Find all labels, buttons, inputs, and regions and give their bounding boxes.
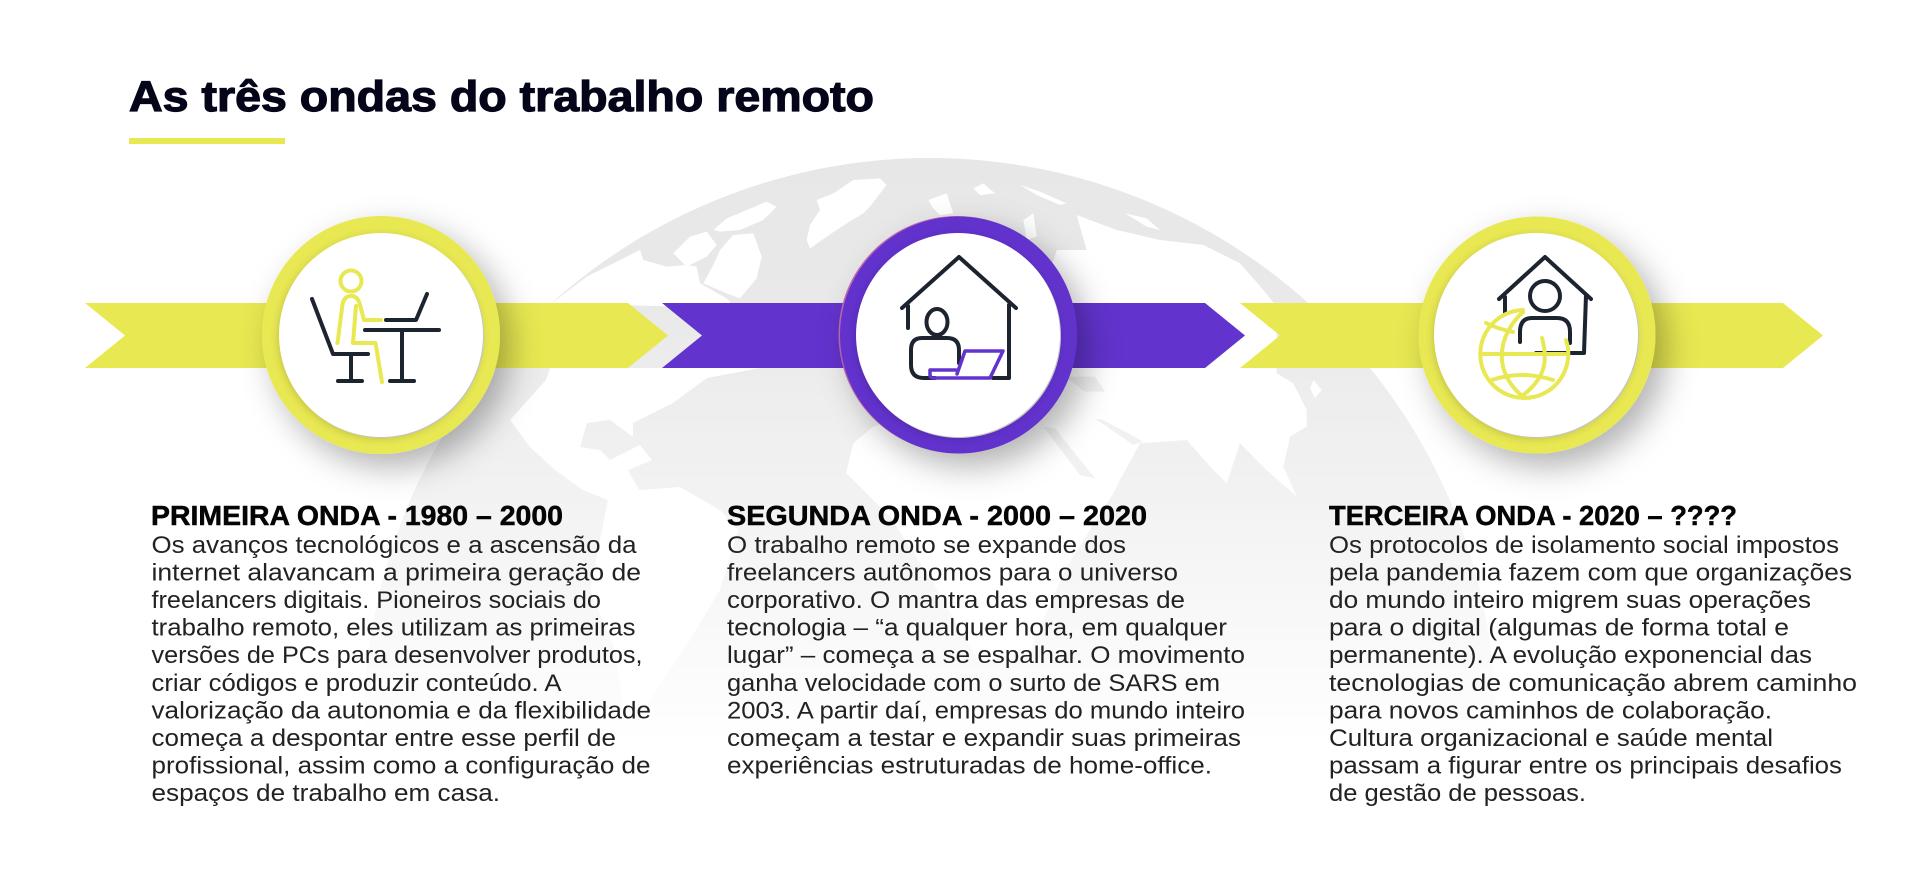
body: second wave: freelancers autônomos para o universo [727, 560, 1178, 587]
body: second wave: experiências estruturadas de home-office. [727, 752, 1212, 779]
body: first wave: valorização da autonomia e da flexibilidade [152, 697, 651, 724]
body: third wave: de gestão de pessoas. [1329, 780, 1586, 807]
body: third wave [1329, 532, 1857, 807]
body: second wave [727, 532, 1245, 779]
body: first wave: internet alavancam a primeira geração de [152, 560, 641, 587]
badge: first wave [262, 216, 500, 454]
heading: second wave: SEGUNDA ONDA - 2000 – 2020 [727, 500, 1147, 531]
body: first wave [152, 532, 651, 807]
title underline [129, 138, 285, 144]
arrow: second wave [662, 303, 1245, 368]
body: third wave: Cultura organizacional e saúde mental [1329, 725, 1773, 752]
badge: second wave [838, 216, 1077, 454]
body: third wave: para o digital (algumas de forma total e [1329, 615, 1789, 642]
body: first wave: freelancers digitais. Pioneiros sociais do [152, 587, 601, 614]
body: second wave: ganha velocidade com o surto de SARS em [727, 670, 1220, 697]
body: first wave: Os avanços tecnológicos e a ascensão da [152, 532, 637, 559]
body: first wave: versões de PCs para desenvolver produtos, [152, 642, 642, 669]
body: third wave: pela pandemia fazem com que organizações [1329, 560, 1852, 587]
text block: first wave [151, 500, 651, 807]
icon: home and globe [1480, 257, 1591, 398]
body: first wave: criar códigos e produzir conteúdo. A [152, 670, 562, 697]
body: second wave: começam a testar e expandir suas primeiras [727, 725, 1241, 752]
heading: first wave: PRIMEIRA ONDA - 1980 – 2000 [151, 500, 563, 531]
land: North and Central America [510, 368, 760, 505]
body: third wave: tecnologias de comunicação abrem caminho [1329, 670, 1857, 697]
text block: third wave [1329, 500, 1857, 807]
body: first wave: profissional, assim como a configuração de [152, 752, 650, 779]
icon: person with laptop at home [902, 257, 1016, 378]
badge: third wave [1418, 216, 1656, 454]
background globe [364, 158, 1496, 760]
body: third wave: passam a figurar entre os principais desafios [1329, 752, 1842, 779]
land: South America [590, 487, 738, 720]
arrow: first wave [85, 303, 668, 368]
body: second wave: O trabalho remoto se expande dos [727, 532, 1126, 559]
text block: second wave [727, 500, 1245, 779]
body: second wave: tecnologia – “a qualquer hora, em qualquer [727, 615, 1227, 642]
icon: person at desk [312, 270, 439, 382]
body: second wave: corporativo. O mantra das empresas de [727, 587, 1185, 614]
land: Greenland and arctic Canada [552, 178, 995, 307]
body: third wave: do mundo inteiro migrem suas operações [1329, 587, 1811, 614]
land: Europe, Asia and Africa [846, 185, 1322, 663]
body: third wave: para novos caminhos de colaboração. [1329, 697, 1772, 724]
body: second wave: lugar” – começa a se espalhar. O movimento [727, 642, 1245, 669]
body: first wave: espaços de trabalho em casa. [152, 780, 500, 807]
body: third wave: Os protocolos de isolamento social impostos [1329, 532, 1839, 559]
body: third wave: permanente). A evolução exponencial das [1329, 642, 1812, 669]
title: As três ondas do trabalho remoto [129, 73, 874, 121]
arrow: third wave [1240, 303, 1823, 368]
heading: third wave: TERCEIRA ONDA - 2020 – ???? [1329, 500, 1737, 531]
body: first wave: trabalho remoto, eles utilizam as primeiras [152, 615, 636, 642]
body: second wave: 2003. A partir daí, empresas do mundo inteiro [727, 697, 1245, 724]
seas: Red Sea and Persian Gulf [1043, 377, 1143, 478]
body: first wave: começa a despontar entre esse perfil de [152, 725, 616, 752]
